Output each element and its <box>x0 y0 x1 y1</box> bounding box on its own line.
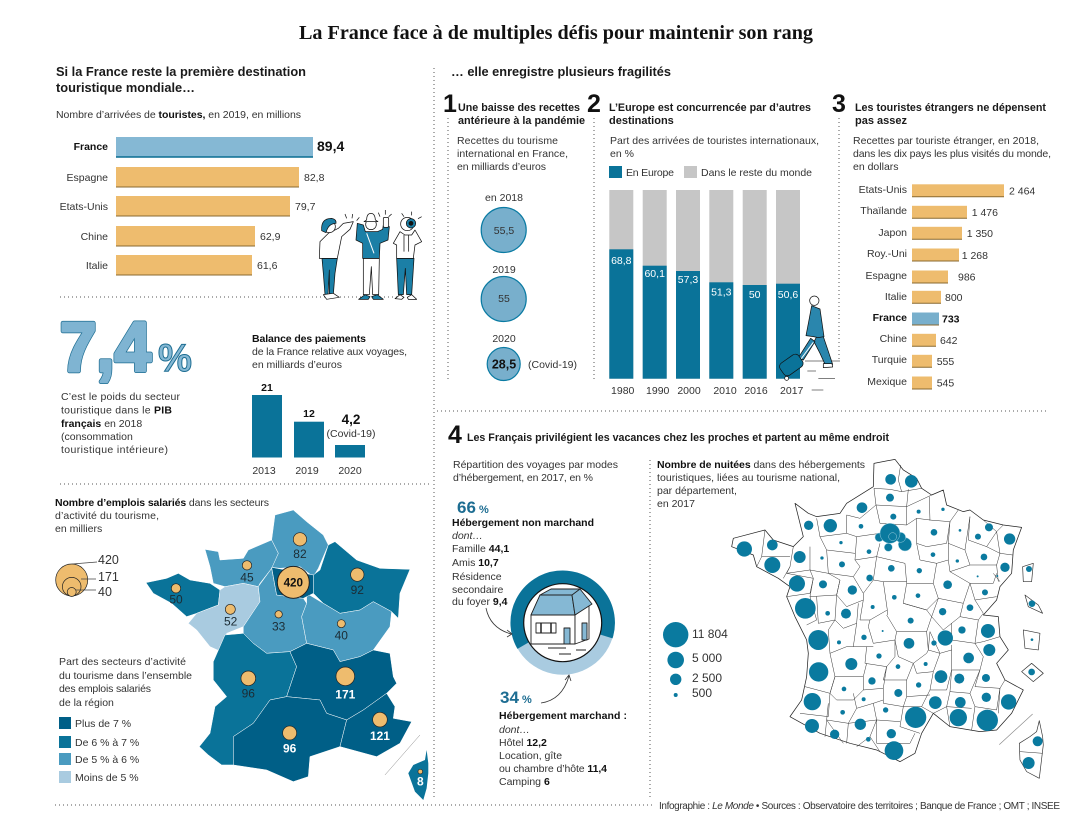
stat: non-commercial lodging 66 %: Famille 44,1 <box>452 543 509 555</box>
stat: commercial lodging 34 %: Location, gîte <box>499 750 562 762</box>
stat: commercial lodging 34 %: 34 % <box>500 688 532 707</box>
subtitle 1: international en France, <box>457 148 568 160</box>
bar chart: spending per tourist: 1 268 <box>962 250 988 262</box>
legend: overnight stays: 2 500 <box>692 671 722 685</box>
panel 3: foreign tourist spending <box>832 90 1051 390</box>
bar chart: spending per tourist: Japon <box>878 227 907 239</box>
heading: regional jobs: en milliers <box>55 523 102 535</box>
big figure: 7,4 %: 7,4 <box>60 308 151 386</box>
bubbles: tourism receipts: 55 <box>498 293 510 305</box>
bar chart: spending per tourist: 2 464 <box>1009 186 1035 198</box>
subtitle 1: en milliards d’euros <box>457 161 546 173</box>
subtitle 3 <box>853 135 1051 173</box>
heading: balance of payments <box>252 333 407 371</box>
bar chart: balance of payments: 21 <box>261 382 273 394</box>
panel: top destinations <box>56 64 422 299</box>
legend: sector share: Part des secteurs d’activité <box>59 656 186 668</box>
bubbles: tourism receipts <box>481 192 577 380</box>
heading: overnight stays <box>657 459 865 510</box>
legend: sector share: de la région <box>59 697 114 709</box>
bar chart: spending per tourist: 1 476 <box>972 207 998 219</box>
number 1: 1 <box>443 90 457 118</box>
heading: regional jobs: Nombre d’emplois salariés dans les secteurs <box>55 497 269 509</box>
text: GDP description: touristique intérieure) <box>61 444 168 456</box>
stacked bar chart: arrivals share <box>609 190 804 397</box>
heading: overnight stays: touristiques, liées au tourisme national, <box>657 472 840 484</box>
stacked bar chart: arrivals share: 1990 <box>646 385 670 397</box>
map: regions of France: 96 <box>283 742 297 756</box>
heading: regional jobs: d’activité du tourisme, <box>55 510 159 522</box>
map: regions of France: 121 <box>370 729 390 743</box>
bar chart: balance of payments: 2020 <box>338 465 362 477</box>
legend: overnight stays: 11 804 <box>692 627 728 641</box>
bar chart: balance of payments: (Covid-19) <box>326 428 376 440</box>
legend: sector share: De 5 % à 6 % <box>75 754 139 766</box>
bar chart: tourist arrivals: 62,9 <box>260 231 281 243</box>
stacked bar chart: arrivals share: 60,1 <box>644 268 665 280</box>
heading 2: destinations <box>609 115 674 127</box>
illustration: tourists taking photos <box>319 210 422 299</box>
bar chart: spending per tourist: 545 <box>937 378 954 390</box>
stacked bar chart: arrivals share: 68,8 <box>611 255 632 267</box>
legend: overnight stays: 500 <box>692 686 712 700</box>
heading 1 <box>458 102 585 127</box>
bar chart: tourist arrivals: 79,7 <box>295 201 316 213</box>
map: regions of France: 45 <box>240 571 254 585</box>
heading: regional jobs <box>55 497 269 535</box>
footer: credits: Infographie : Le Monde • Sources : Observatoire des territoires ; Banque de France ; OMT ; INSEE <box>659 801 1060 812</box>
map: regions of France: 8 <box>417 774 424 788</box>
icon: house <box>531 589 592 654</box>
bar chart: tourist arrivals: Etats-Unis <box>60 201 108 213</box>
legend: sector share: Moins de 5 % <box>75 772 139 784</box>
panel 4: French holidays <box>448 421 1043 788</box>
legend: circle sizes: 40 <box>98 585 112 599</box>
bubbles: tourism receipts: 55,5 <box>494 225 514 237</box>
legend: overnight stays <box>663 622 728 700</box>
text: GDP description: C’est le poids du secteur <box>61 391 180 403</box>
stat: non-commercial lodging 66 %: Amis 10,7 <box>452 557 499 569</box>
subtitle 3: en dollars <box>853 161 899 173</box>
bar chart: spending per tourist: Turquie <box>872 354 907 366</box>
bubbles: tourism receipts: 2019 <box>492 264 516 276</box>
number 2: 2 <box>587 90 601 118</box>
heading: balance of payments: de la France relative aux voyages, <box>252 346 407 358</box>
stat: non-commercial lodging 66 %: secondaire <box>452 584 504 596</box>
bar chart: spending per tourist: 800 <box>945 292 963 304</box>
bar chart: balance of payments: 4,2 <box>342 412 360 427</box>
text: GDP description: (consommation <box>61 431 133 443</box>
heading 2: L’Europe est concurrencée par d’autres <box>609 102 811 114</box>
bar chart: spending per tourist: 986 <box>958 272 976 284</box>
bar chart: tourist arrivals: Italie <box>86 260 108 272</box>
bar chart: spending per tourist: Mexique <box>867 376 907 388</box>
stacked bar chart: arrivals share: 50,6 <box>778 289 798 301</box>
bar chart: spending per tourist: Thaïlande <box>860 205 907 217</box>
legend: circle sizes: 420 <box>98 553 119 567</box>
heading 3 <box>855 102 1046 127</box>
legend: sector share: Plus de 7 % <box>75 718 131 730</box>
subtitle 1 <box>457 135 568 173</box>
map: regions of France: 92 <box>351 583 364 597</box>
panel 2: Europe competition <box>587 90 840 397</box>
map: regions of France: 82 <box>293 547 307 561</box>
heading: overnight stays: en 2017 <box>657 498 695 510</box>
heading: top destinations: touristique mondiale… <box>56 80 195 95</box>
stacked bar chart: arrivals share: 1980 <box>611 385 635 397</box>
panel 1: falling receipts <box>443 90 585 380</box>
stacked bar chart: arrivals share: 51,3 <box>711 286 732 298</box>
bubbles: tourism receipts: 28,5 <box>492 358 516 372</box>
bar chart: spending per tourist: 733 <box>942 314 960 326</box>
stat: non-commercial lodging 66 %: dont… <box>452 530 483 542</box>
heading 1: Une baisse des recettes <box>458 102 580 114</box>
legend 2 <box>609 166 812 179</box>
stat: non-commercial lodging 66 %: Hébergement non marchand <box>452 517 594 529</box>
bar chart: tourist arrivals: 82,8 <box>304 172 325 184</box>
subtitle: accommodation: d’hébergement, en 2017, en % <box>453 472 593 484</box>
stat: commercial lodging 34 %: ou chambre d’hôte 11,4 <box>499 763 607 775</box>
legend: circle sizes <box>56 553 119 599</box>
heading: overnight stays: par département, <box>657 485 737 497</box>
subtitle 2: en % <box>610 148 634 160</box>
text: GDP description: touristique dans le PIB <box>61 404 172 416</box>
bar chart: spending per tourist: Roy.-Uni <box>867 248 907 260</box>
bar chart: balance of payments <box>252 382 376 477</box>
stat: commercial lodging 34 %: dont… <box>499 724 530 736</box>
heading: overnight stays: Nombre de nuitées dans des hébergements <box>657 459 865 471</box>
map: regions of France: 171 <box>335 687 356 701</box>
bar chart: spending per tourist: Espagne <box>866 270 907 282</box>
legend: sector share <box>59 656 192 784</box>
map: regions of France: 420 <box>284 577 303 590</box>
number 3: 3 <box>832 90 846 118</box>
legend: sector share: des emplois salariés <box>59 683 151 695</box>
heading 2 <box>609 102 811 127</box>
map: regions of France: 52 <box>224 614 238 628</box>
stat: non-commercial lodging 66 %: Résidence <box>452 571 502 583</box>
legend 2: Dans le reste du monde <box>701 167 812 179</box>
subtitle 2 <box>610 135 819 160</box>
legend: circle sizes: 171 <box>98 570 119 584</box>
legend: overnight stays: 5 000 <box>692 651 722 665</box>
big figure: 7,4 %: 7,4 <box>60 308 151 386</box>
stat: commercial lodging 34 %: Camping 6 <box>499 776 550 788</box>
stat: non-commercial lodging 66 %: du foyer 9,4 <box>452 596 508 608</box>
subtitle 3: dans les dix pays les plus visités du monde, <box>853 148 1051 160</box>
legend 2: En Europe <box>626 167 674 179</box>
text: GDP description: français en 2018 <box>61 418 142 430</box>
panel: balance of payments <box>252 333 407 477</box>
title: La France face à de multiples défis pour maintenir son rang <box>299 22 814 44</box>
map: regions of France: 96 <box>242 687 255 701</box>
heading 1: antérieure à la pandémie <box>458 115 585 127</box>
big figure: 7,4 %: % <box>158 337 192 380</box>
bar chart: tourist arrivals <box>60 137 344 275</box>
bar chart: tourist arrivals: Chine <box>81 231 108 243</box>
map: departments of France <box>732 459 1043 778</box>
legend: sector share: du tourisme dans l’ensemble <box>59 670 192 682</box>
bar chart: spending per tourist: France <box>873 312 907 324</box>
bar chart: spending per tourist: 642 <box>940 335 958 347</box>
stacked bar chart: arrivals share: 57,3 <box>678 274 698 286</box>
donut with house <box>511 571 615 675</box>
stat: commercial lodging 34 %: Hôtel 12,2 <box>499 737 547 749</box>
bar chart: spending per tourist: 555 <box>937 356 954 368</box>
bar chart: spending per tourist: 1 350 <box>967 228 993 240</box>
map: regions of France: 50 <box>169 593 183 607</box>
illustration: traveller with suitcase <box>778 296 840 390</box>
heading 3: Les touristes étrangers ne dépensent <box>855 102 1046 114</box>
panel: regional jobs <box>55 497 428 800</box>
bar chart: tourist arrivals: 89,4 <box>317 138 344 154</box>
arrow: to commercial <box>541 675 571 703</box>
bubbles: tourism receipts: (Covid-19) <box>528 359 577 371</box>
bar chart: balance of payments: 12 <box>303 408 315 420</box>
heading 4: Les Français privilégient les vacances chez les proches et partent au même endroit <box>467 432 889 444</box>
stat: non-commercial lodging 66 % <box>452 498 594 608</box>
bar chart: spending per tourist: Etats-Unis <box>859 184 907 196</box>
legend: sector share: De 6 % à 7 % <box>75 737 139 749</box>
heading: fragilities: … elle enregistre plusieurs fragilités <box>451 64 671 79</box>
bar chart: tourist arrivals: 61,6 <box>257 260 278 272</box>
number 4: 4 <box>448 421 462 449</box>
text: GDP description <box>61 391 180 456</box>
map: regions of France: 33 <box>272 620 286 634</box>
stacked bar chart: arrivals share: 50 <box>749 289 761 301</box>
stat: non-commercial lodging 66 %: 66 % <box>457 498 489 517</box>
arrow: to non-commercial <box>486 608 512 637</box>
subtitle: arrivals: Nombre d’arrivées de touristes, en 2019, en millions <box>56 109 301 121</box>
subtitle 1: Recettes du tourisme <box>457 135 558 147</box>
bar chart: balance of payments: 2013 <box>252 465 276 477</box>
heading: top destinations <box>56 64 306 95</box>
subtitle 3: Recettes par touriste étranger, en 2018, <box>853 135 1039 147</box>
stacked bar chart: arrivals share: 2000 <box>677 385 701 397</box>
panel: share of GDP <box>60 308 192 456</box>
bar chart: tourist arrivals: Espagne <box>67 172 108 184</box>
stat: commercial lodging 34 % <box>499 688 627 788</box>
bar chart: tourist arrivals: France <box>74 141 108 153</box>
heading: balance of payments: Balance des paiements <box>252 333 366 345</box>
bar chart: balance of payments: 2019 <box>295 465 319 477</box>
bar chart: spending per tourist: Chine <box>880 333 907 345</box>
heading 3: pas assez <box>855 115 907 127</box>
bar chart: spending per tourist <box>859 184 1035 390</box>
subtitle 2: Part des arrivées de touristes internationaux, <box>610 135 819 147</box>
subtitle: accommodation: Répartition des voyages par modes <box>453 459 618 471</box>
heading: top destinations: Si la France reste la première destination <box>56 64 306 79</box>
subtitle: accommodation <box>453 459 618 484</box>
bubbles: tourism receipts: 2020 <box>492 333 516 345</box>
stacked bar chart: arrivals share: 2016 <box>744 385 768 397</box>
map: regions of France: 40 <box>335 629 348 643</box>
bar chart: spending per tourist: Italie <box>885 291 907 303</box>
map: regions of France <box>146 510 428 800</box>
stacked bar chart: arrivals share: 2010 <box>713 385 737 397</box>
stat: commercial lodging 34 %: Hébergement marchand : <box>499 710 627 722</box>
stacked bar chart: arrivals share: 2017 <box>780 385 804 397</box>
bubbles: tourism receipts: en 2018 <box>485 192 523 204</box>
heading: balance of payments: en milliards d’euros <box>252 359 342 371</box>
